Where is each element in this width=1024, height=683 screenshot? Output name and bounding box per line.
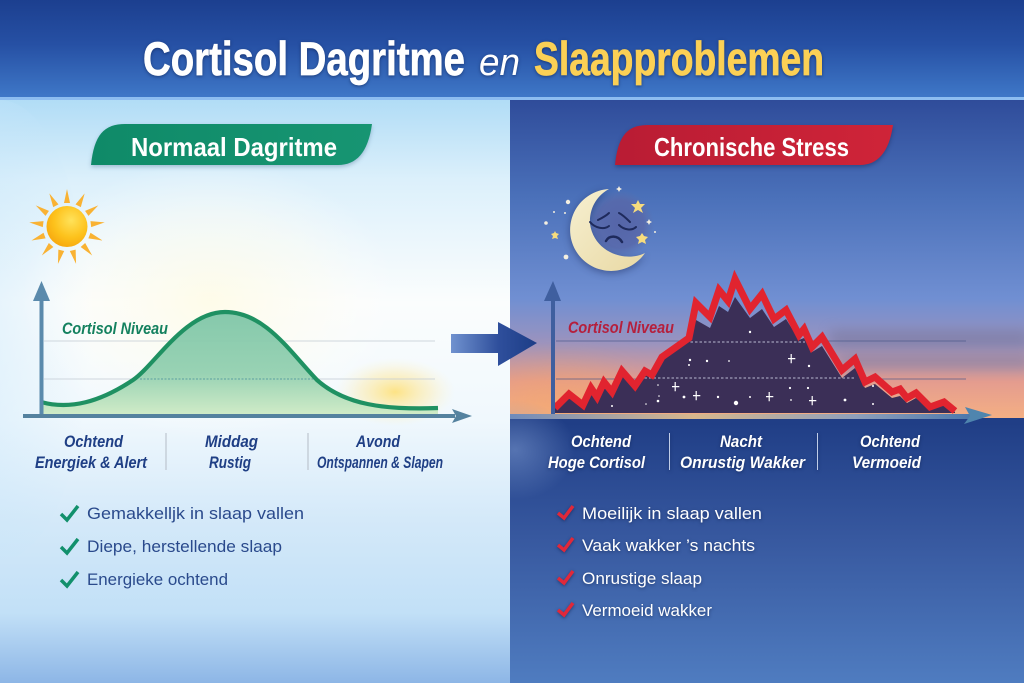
panel: chronic stress background	[455, 100, 1024, 683]
time labels: chronic stress: Nacht	[720, 432, 763, 451]
heading badge: Normaal Dagritme: Normaal Dagritme	[131, 132, 337, 162]
heading badge: Chronische Stress	[615, 125, 893, 165]
time labels: chronic stress: Ochtend	[571, 432, 632, 451]
chart: normal cortisol curve	[23, 281, 472, 423]
x axis	[23, 409, 472, 423]
time labels: normal rhythm: Energiek & Alert	[35, 453, 148, 472]
time labels: chronic stress	[548, 432, 922, 472]
curve line	[41, 312, 438, 408]
time labels: normal rhythm: Avond	[355, 432, 401, 451]
curve area	[41, 312, 438, 414]
time labels: normal rhythm: Middag	[205, 432, 259, 451]
grid lines	[44, 341, 435, 379]
axis label: Cortisol Niveau	[568, 318, 675, 337]
time labels: normal rhythm: Rustig	[209, 453, 251, 472]
checklist: chronic stress: Moeilijk in slaap vallen	[582, 504, 762, 523]
title: Slaapproblemen	[534, 32, 824, 85]
time labels: normal rhythm: Ontspannen & Slapen	[317, 454, 443, 472]
checklist: normal rhythm: Energieke ochtend	[87, 570, 228, 589]
time labels: chronic stress: Ochtend	[860, 432, 921, 451]
time labels: chronic stress: Onrustig Wakker	[680, 453, 806, 472]
dashed levels	[640, 342, 855, 378]
y axis	[33, 281, 50, 416]
checklist: chronic stress: Vaak wakker ’s nachts	[582, 536, 755, 555]
x axis	[510, 407, 992, 424]
icon: sad crescent moon	[544, 186, 656, 271]
title: Cortisol Dagritme	[143, 32, 465, 85]
time labels: chronic stress: Hoge Cortisol	[548, 453, 646, 472]
panel: normal rhythm background	[0, 98, 511, 683]
icon: sun	[29, 189, 105, 265]
title	[143, 32, 824, 85]
header banner	[0, 0, 1024, 100]
checklist: chronic stress: Vermoeid wakker	[582, 601, 712, 620]
heading badge: Chronische Stress: Chronische Stress	[654, 132, 849, 162]
time labels: chronic stress: Vermoeid	[852, 453, 922, 472]
grid lines	[556, 341, 966, 379]
time labels: normal rhythm	[35, 432, 443, 472]
arrow: normal to stress	[451, 322, 537, 366]
checklist: chronic stress: Onrustige slaap	[582, 569, 702, 588]
checklist: normal rhythm: Gemakkelljk in slaap vallen	[87, 504, 304, 523]
y axis	[544, 281, 561, 414]
checklist: chronic stress	[558, 504, 762, 620]
axis label: Cortisol Niveau	[62, 319, 169, 338]
title: en	[479, 42, 520, 84]
heading badge: Normaal Dagritme	[91, 124, 372, 165]
red spike line	[555, 279, 955, 411]
checklist: normal rhythm	[61, 504, 304, 589]
chart: chronic stress cortisol curve	[510, 279, 992, 424]
dark night mountain	[553, 297, 955, 413]
stars	[611, 331, 874, 407]
checklist: normal rhythm: Diepe, herstellende slaap	[87, 537, 282, 556]
time labels: normal rhythm: Ochtend	[64, 432, 124, 451]
